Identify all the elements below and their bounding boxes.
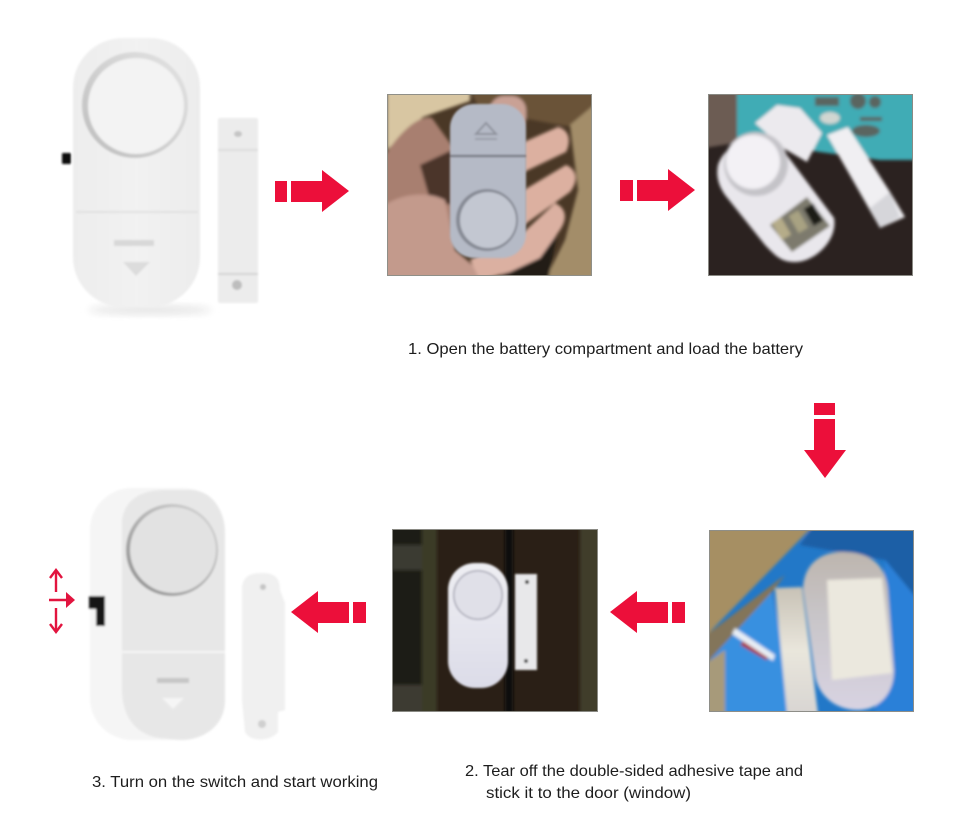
photo: alarm on door: [388, 525, 602, 715]
photo: adhesive tape on alarm back: [710, 531, 913, 711]
arrow: right 2: [620, 169, 695, 211]
arrow: right 1: [275, 170, 349, 212]
caption: step 2: 2. Tear off the double-sided adhesive tape and: [465, 763, 803, 780]
battery cover marks: [114, 240, 154, 276]
alarm side: [90, 488, 225, 740]
product photo: alarm with switch: [89, 488, 285, 740]
magnet piece: [827, 127, 905, 228]
icon: red switch direction arrows: [49, 570, 75, 632]
arrow: left 2: [291, 591, 366, 633]
photo 3 border: [710, 530, 914, 712]
caption: step 3: 3. Turn on the switch and start working: [92, 774, 378, 791]
siren button: [126, 504, 218, 596]
magnet: [218, 118, 258, 303]
caption: step 2: [465, 763, 803, 802]
photo: open battery compartment: [705, 90, 916, 276]
caption: step 2: stick it to the door (window): [486, 785, 691, 802]
product photo: alarm and magnet: [62, 38, 258, 315]
alarm body: [73, 38, 200, 307]
photo: hand holding alarm: [388, 95, 591, 275]
alarm in hand: [450, 104, 526, 258]
batteries: [770, 197, 830, 252]
photo 1 border: [388, 94, 592, 276]
photo 2 border: [708, 94, 912, 276]
tape strip: [775, 587, 818, 714]
alarm back: [803, 552, 894, 710]
alarm siren button: [82, 52, 188, 158]
arrow: left 1: [610, 591, 685, 633]
door magnet: [515, 574, 537, 670]
magnet: [242, 573, 285, 740]
door alarm: [448, 563, 508, 688]
battery cover marks: [157, 678, 189, 709]
caption: step 1: 1. Open the battery compartment and load the battery: [408, 341, 803, 358]
seam: [122, 651, 225, 653]
hand: [388, 116, 452, 232]
alarm seam: [76, 211, 198, 213]
photo 4 border: [392, 530, 598, 712]
switch: [89, 596, 105, 626]
icon: side switch: [62, 153, 71, 164]
open alarm: [717, 141, 834, 262]
arrow: down: [804, 403, 846, 478]
battery cover: [755, 105, 822, 162]
alarm front: [122, 490, 225, 740]
